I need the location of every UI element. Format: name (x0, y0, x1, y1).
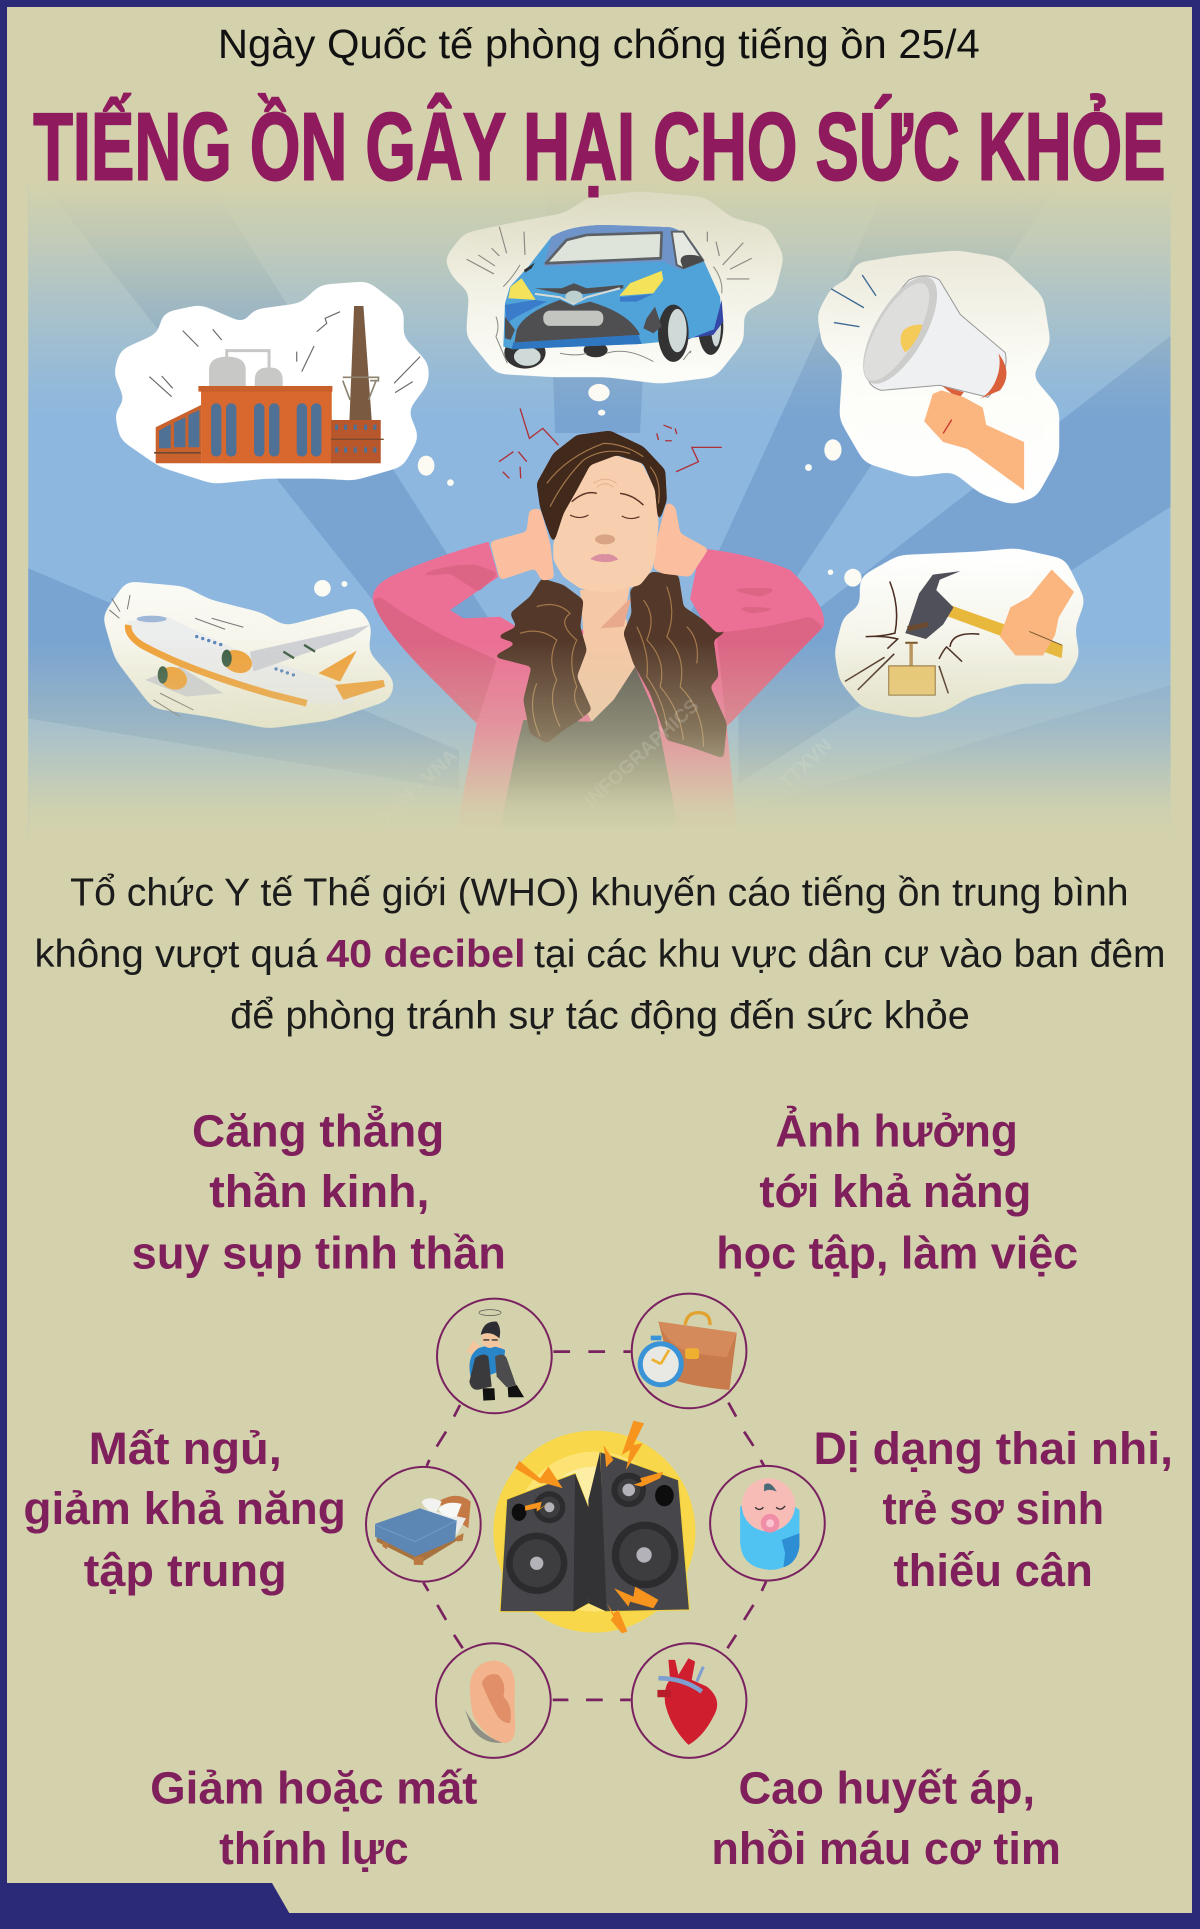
cloud: airplane (107, 580, 390, 724)
effect: fetal deformity: thiếu cân (894, 1545, 1093, 1596)
icon: hammer on nail (845, 569, 1074, 695)
effect: insomnia: giảm khả năng (23, 1483, 346, 1534)
circle: bed (366, 1467, 481, 1582)
WHO recommendation text block: 40 decibel (326, 932, 526, 976)
right hand and forearm (653, 502, 708, 577)
woman covering her ears (359, 408, 837, 844)
circle: baby (710, 1466, 825, 1581)
effect: fetal deformity: trẻ sơ sinh (882, 1483, 1104, 1534)
bottom fade (28, 640, 1170, 843)
effect: hearing loss: thính lực (219, 1823, 409, 1874)
effect: learning and work: tới khả năng (759, 1166, 1031, 1217)
effect: nervous stress (132, 1104, 506, 1278)
effect: insomnia: Mất ngủ, (89, 1423, 282, 1474)
effect: nervous stress: Căng thẳng (192, 1104, 444, 1157)
effect: insomnia (23, 1423, 346, 1596)
effect: learning and work (716, 1105, 1078, 1278)
icon: airplane (109, 595, 385, 717)
icon: megaphone with hand (831, 266, 1024, 490)
effect: fetal deformity: Dị dạng thai nhi, (814, 1423, 1173, 1474)
effect: nervous stress: thần kinh, (209, 1166, 430, 1217)
long hair left (493, 578, 592, 743)
effect: hearing loss (150, 1763, 478, 1874)
watermark: INFOGRAPHICS (581, 696, 704, 812)
stress lines (499, 408, 722, 478)
face (553, 455, 658, 593)
circle: heart (632, 1643, 746, 1758)
WHO recommendation text block: không vượt quá (34, 932, 318, 976)
effect: insomnia: tập trung (84, 1545, 287, 1596)
watermark: TTXVN (776, 735, 837, 794)
hair strands (520, 587, 703, 747)
left hand and forearm (490, 508, 554, 581)
cloud: hammer (828, 553, 1080, 713)
circle: briefcase and clock (632, 1294, 746, 1408)
WHO recommendation text block: để phòng tránh sự tác động đến sức khỏe (230, 993, 970, 1037)
cloud: factory (118, 286, 454, 486)
effect: nervous stress: suy sụp tinh thần (132, 1227, 506, 1278)
watermark: TTXVN - VNA (359, 746, 462, 844)
subtitle: Ngày Quốc tế phòng chống tiếng ồn 25/4 (218, 21, 980, 67)
circle: stressed person (437, 1299, 552, 1413)
cloud: car (449, 196, 779, 416)
effect: hypertension: nhồi máu cơ tim (711, 1823, 1061, 1874)
cloud: megaphone (805, 255, 1054, 500)
sun rays (28, 185, 1170, 830)
top hair (537, 431, 667, 544)
facial features (570, 493, 643, 519)
dark top (500, 667, 678, 828)
circle: ear (436, 1643, 551, 1758)
effect: hearing loss: Giảm hoặc mất (150, 1763, 478, 1814)
icon: car (467, 225, 752, 369)
watermark (359, 696, 837, 844)
illustration panel: noise sources and stressed woman (28, 185, 1170, 844)
icon: speakers on yellow sun (493, 1421, 695, 1633)
top fade (28, 185, 1170, 418)
icon: factory (149, 306, 420, 463)
effect: hypertension (711, 1763, 1061, 1874)
effect: fetal deformity (814, 1423, 1173, 1596)
WHO recommendation text block: tại các khu vực dân cư vào ban đêm (534, 932, 1166, 976)
long hair right (623, 572, 740, 758)
pink cardigan and sleeves (373, 542, 824, 828)
WHO recommendation text block (34, 870, 1166, 1037)
WHO recommendation text block: Tổ chức Y tế Thế giới (WHO) khuyến cáo tiếng ồn trung bình (70, 870, 1129, 914)
effect: learning and work: Ảnh hưởng (775, 1105, 1018, 1157)
neck and chest (570, 585, 635, 722)
sleeve shading (373, 565, 823, 727)
effect: learning and work: học tập, làm việc (716, 1227, 1078, 1278)
effect: hypertension: Cao huyết áp, (738, 1763, 1035, 1814)
hexagon diagram with speakers (366, 1294, 825, 1758)
